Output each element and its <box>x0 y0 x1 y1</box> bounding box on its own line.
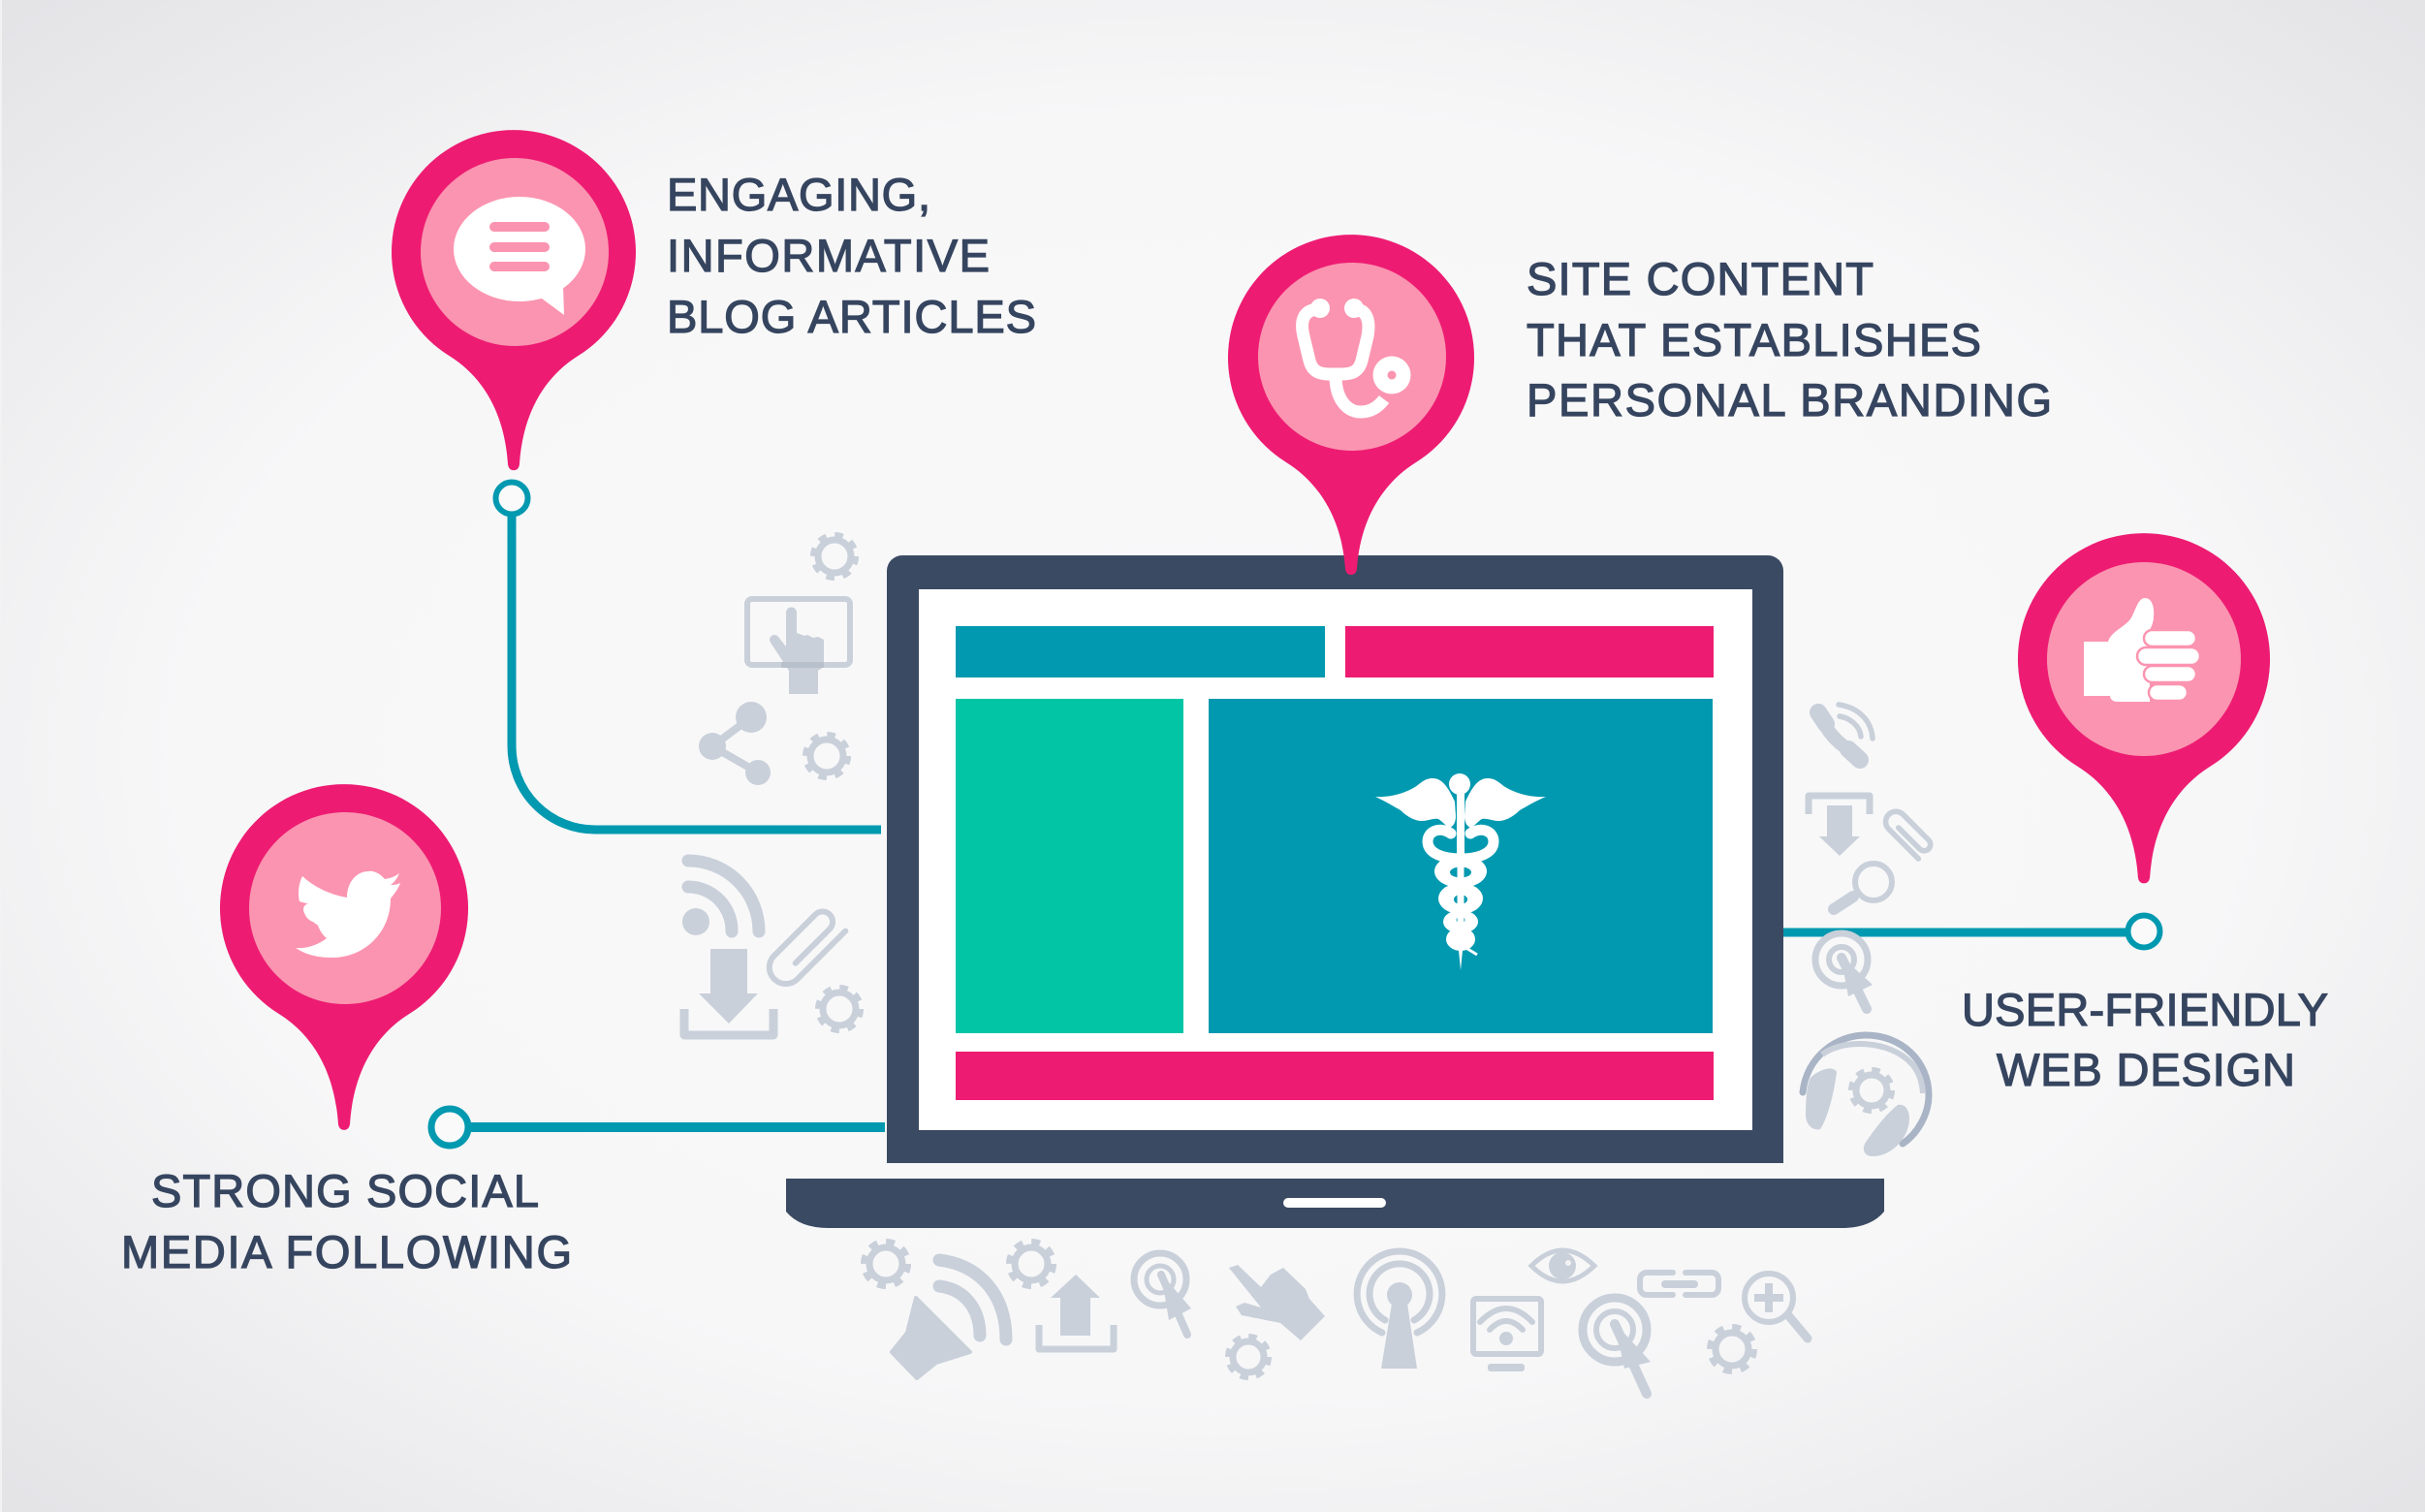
icon: rss <box>682 861 759 935</box>
icon: gear <box>864 1242 908 1286</box>
sidebar <box>956 699 1183 1033</box>
icon: pointing hand <box>1229 1265 1325 1340</box>
laptop screen <box>919 589 1752 1130</box>
text: site content: PERSONAL BRANDING <box>1527 374 2052 425</box>
icon: target cursor <box>1815 933 1873 1009</box>
pin: site content <box>1228 235 1474 575</box>
icon: stethoscope <box>1303 299 1411 412</box>
text: social media: STRONG SOCIAL <box>151 1165 539 1216</box>
icon: gear <box>813 535 856 578</box>
icon: paperclip <box>763 907 846 991</box>
connector: blog pin to laptop <box>496 483 881 830</box>
connector: social pin to laptop <box>431 1109 885 1146</box>
text: blog articles <box>667 169 1036 342</box>
pin: blog articles <box>392 130 636 470</box>
icon: paperclip <box>1881 807 1933 859</box>
text: site content: SITE CONTENT <box>1527 253 1874 304</box>
text: blog articles: INFORMATIVE <box>667 230 990 281</box>
icon: touch screen <box>747 599 850 694</box>
header bar pink <box>1345 626 1714 677</box>
laptop base <box>786 1179 1884 1228</box>
text: site content <box>1527 253 2052 425</box>
text: blog articles: ENGAGING, <box>667 169 930 220</box>
text: social media <box>121 1165 572 1277</box>
icon: gear <box>1710 1327 1754 1371</box>
icon: magnifier plus <box>1745 1274 1808 1339</box>
icon: broadcast antenna <box>1357 1251 1442 1369</box>
icon: speech bubble <box>454 197 585 315</box>
icon: twitter bird <box>296 871 400 958</box>
text: web design <box>1962 984 2328 1095</box>
pin: social media <box>220 784 468 1130</box>
icon: wifi monitor <box>1473 1299 1541 1371</box>
icon: chain link <box>1640 1273 1718 1295</box>
laptop <box>786 555 1884 1228</box>
icon: magnifier <box>1834 864 1892 909</box>
icon: phone <box>1818 705 1873 760</box>
icon: headset with gear <box>1803 1035 1929 1156</box>
icon: gear <box>1009 1242 1054 1286</box>
icon: big target cursor <box>1583 1298 1651 1394</box>
laptop bottom edge squared <box>887 1115 1783 1163</box>
text: web design: USER-FRIENDLY <box>1962 984 2328 1035</box>
icon: eye <box>1531 1250 1594 1281</box>
text: web design: WEB DESIGN <box>1997 1044 2295 1095</box>
icons right of laptop <box>1803 705 1933 1156</box>
icon: share <box>699 702 771 785</box>
icon: upload tray <box>1039 1275 1114 1349</box>
icon: gear <box>805 735 848 777</box>
text: site content: THAT ESTABLISHES <box>1527 314 1981 365</box>
header bar teal <box>956 626 1325 677</box>
icon: megaphone <box>892 1260 1006 1378</box>
icon: thumbs up <box>2084 598 2200 702</box>
laptop notch <box>1283 1198 1386 1208</box>
icon: download bracket <box>1809 796 1870 856</box>
connector: design pin to laptop <box>1783 915 2159 948</box>
text: blog articles: BLOG ARTICLES <box>667 291 1036 342</box>
icons left of laptop <box>682 535 861 1035</box>
icon: download tray <box>684 949 773 1035</box>
icon: target cursor <box>1134 1253 1191 1335</box>
text: social media: MEDIA FOLLOWING <box>121 1226 572 1277</box>
icon: caduceus <box>1375 773 1546 970</box>
footer bar <box>956 1052 1714 1100</box>
pin: web design <box>2018 533 2270 883</box>
main content panel <box>1209 699 1713 1033</box>
laptop lid <box>887 555 1783 1163</box>
icon: gear <box>1228 1337 1269 1377</box>
icons below laptop <box>864 1242 1808 1394</box>
icon: gear <box>818 988 861 1030</box>
